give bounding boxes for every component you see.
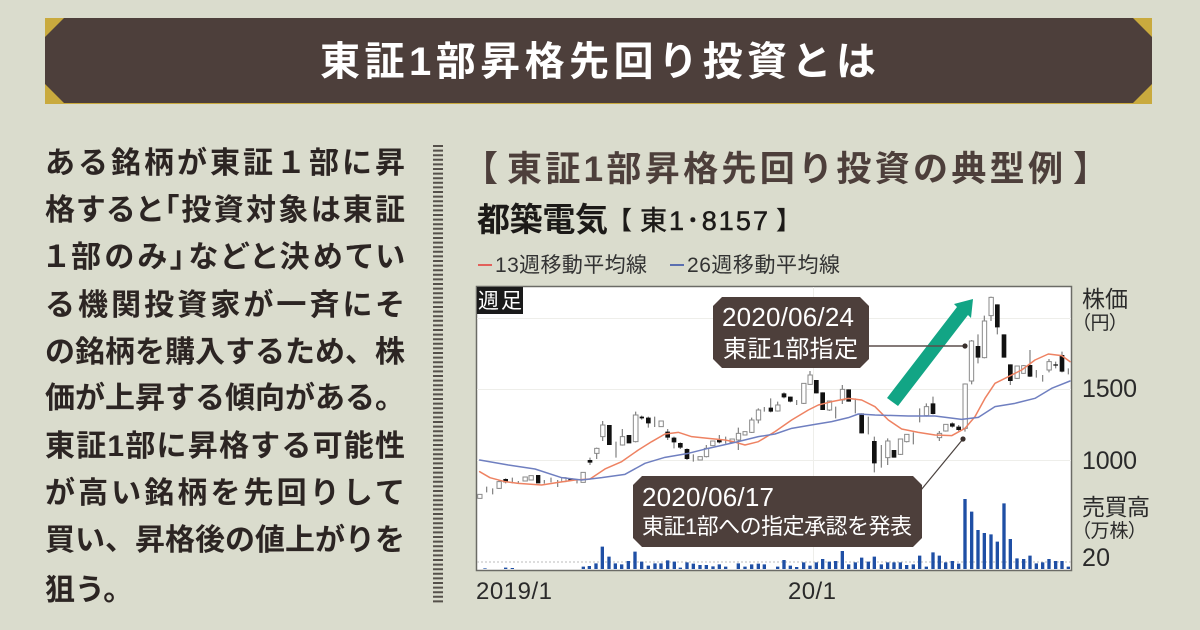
- volume bars: 2019: [485, 547, 764, 569]
- moving average lines: [480, 354, 1070, 485]
- legend: 26週移動平均線: [687, 254, 840, 277]
- volume axis labels: 20: [1082, 544, 1110, 572]
- text block: explanation: １部のみ」などと決めてい: [45, 241, 405, 274]
- stock name: 東1･8157: [640, 206, 768, 236]
- callout: 2020/06/24: 東証1部指定: [723, 336, 858, 363]
- stock name: 都築電気: [477, 201, 608, 238]
- stock chart: [476, 286, 1150, 605]
- text block: explanation: ある銘柄が東証１部に昇: [45, 146, 405, 180]
- text block: explanation: が高い銘柄を先回りして: [45, 476, 405, 510]
- weekly label: 週足: [478, 290, 522, 313]
- candlesticks: 2020: [776, 297, 1068, 472]
- callout: 2020/06/17: 2020/06/17: [642, 482, 774, 512]
- leader line: 06/24: [868, 343, 968, 349]
- text block: explanation: 狙う。: [45, 574, 133, 607]
- callout: 2020/06/24: 2020/06/24: [722, 302, 854, 332]
- volume axis labels: [1081, 494, 1150, 572]
- price axis labels: [1081, 286, 1137, 475]
- volume axis labels: （万株）: [1081, 520, 1138, 542]
- text block: explanation: の銘柄を購入するため、株: [45, 336, 405, 369]
- price axis labels: 株価: [1082, 286, 1128, 312]
- chart heading: 東証1部昇格先回り投資の典型例: [507, 150, 1063, 189]
- time axis labels: 20/1: [788, 578, 836, 605]
- text block: explanation: 東証1部に昇格する可能性: [45, 430, 405, 463]
- time axis labels: 2019/1: [476, 578, 552, 605]
- text block: explanation: [45, 146, 405, 607]
- leader line: 06/17: [921, 436, 966, 490]
- chart heading: 【: [463, 150, 498, 189]
- time axis labels: [476, 578, 836, 605]
- title banner: [45, 18, 1152, 104]
- 26 week line: [480, 381, 1070, 480]
- volume axis labels: 売買高: [1082, 494, 1150, 520]
- stock name: 】: [776, 207, 801, 235]
- text block: explanation: る機関投資家が一斉にそ: [45, 288, 405, 322]
- callout: 2020/06/17: [633, 476, 922, 547]
- stock name: [477, 201, 801, 238]
- text block: explanation: 価が上昇する傾向がある。: [45, 381, 405, 415]
- arrow: rising trend: [887, 299, 973, 406]
- text block: explanation: 買い、昇格後の値上がりを: [45, 523, 405, 557]
- title: 東証1部昇格先回り投資とは: [320, 40, 876, 84]
- callout: 2020/06/17: 東証1部への指定承認を発表: [642, 514, 912, 539]
- volume bars: 2020: [778, 499, 1068, 569]
- 13 week line: [480, 354, 1070, 485]
- price axis labels: （円）: [1081, 312, 1119, 334]
- candlesticks: 2019: [478, 398, 773, 498]
- legend: 13週移動平均線: [495, 254, 647, 277]
- price axis labels: 1000: [1082, 447, 1137, 475]
- callout: 2020/06/24: [713, 297, 869, 368]
- chart heading: 】: [1073, 150, 1108, 189]
- stock name: 【: [607, 207, 632, 235]
- legend: [478, 254, 840, 277]
- price axis labels: 1500: [1082, 375, 1137, 403]
- text block: explanation: 格すると「投資対象は東証: [45, 194, 405, 227]
